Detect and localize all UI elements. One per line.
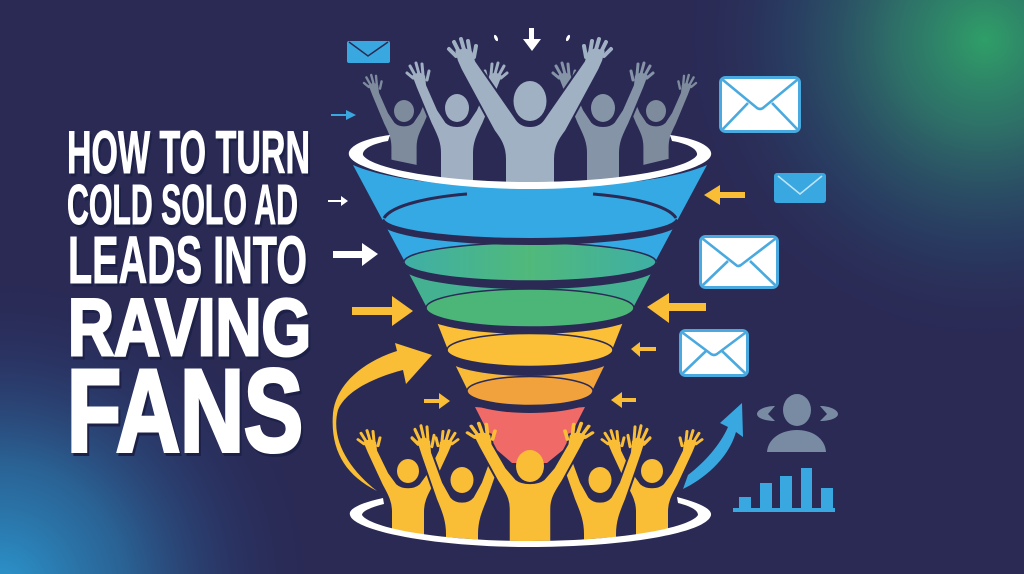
fan: far left [358,430,458,552]
funnel band: yellow [444,334,616,376]
envelope: large white 3 [680,330,748,376]
person: inner left grey [407,63,507,198]
title line 4: RAVING [68,283,311,373]
icon: person with motion marks [757,394,838,452]
arrow: yellow right lower [631,342,656,357]
title line 2: COLD SOLO AD [67,173,298,237]
arrow: big curved yellow [333,343,432,491]
funnel band: blue [381,194,679,245]
arrow: large white [333,243,378,266]
funnel band: teal [402,243,658,289]
title line 1: HOW TO TURN [67,119,310,186]
fan: inner right [566,424,652,540]
funnel side: green [403,262,657,308]
fan: centre [468,423,592,552]
funnel side: blue [353,165,707,262]
arrow: yellow right lowest [611,392,636,408]
arrow: yellow right upper [704,185,745,205]
chart: blue bar chart [733,468,835,512]
funnel tip: red [475,407,585,463]
title line 5: FANS [67,345,303,476]
person: inner right grey [553,63,653,198]
bottom ring [350,497,711,547]
arrow: curved blue [683,403,743,489]
fan: far right [602,430,702,552]
person: far left grey [362,74,427,165]
envelope: small blue right [774,173,826,203]
icon: top down arrow with sparks [493,28,571,51]
fan: inner left [410,424,494,540]
icon: small blue envelope top left [347,41,390,63]
funnel side: yellow [433,312,627,350]
arrow: small white [328,196,348,206]
envelope: large white 1 [720,78,800,132]
funnel band: green [422,289,638,334]
arrow: yellow left lower [424,393,450,409]
envelope: large white 2 [700,236,778,288]
funnel [349,135,711,463]
funnel rim [349,135,711,189]
arrow: yellow right middle [647,293,706,323]
title line 3: LEADS INTO [68,223,307,298]
arrow: yellow left middle [352,296,413,326]
person: far right grey [633,74,698,165]
funnel side: orange [448,350,612,391]
group: yellow fans [356,422,704,541]
arrow: small blue [331,110,356,120]
title [67,119,311,476]
group: grey crowd in funnel [362,37,698,182]
funnel band: orange [464,376,596,413]
person: centre grey [449,39,611,221]
